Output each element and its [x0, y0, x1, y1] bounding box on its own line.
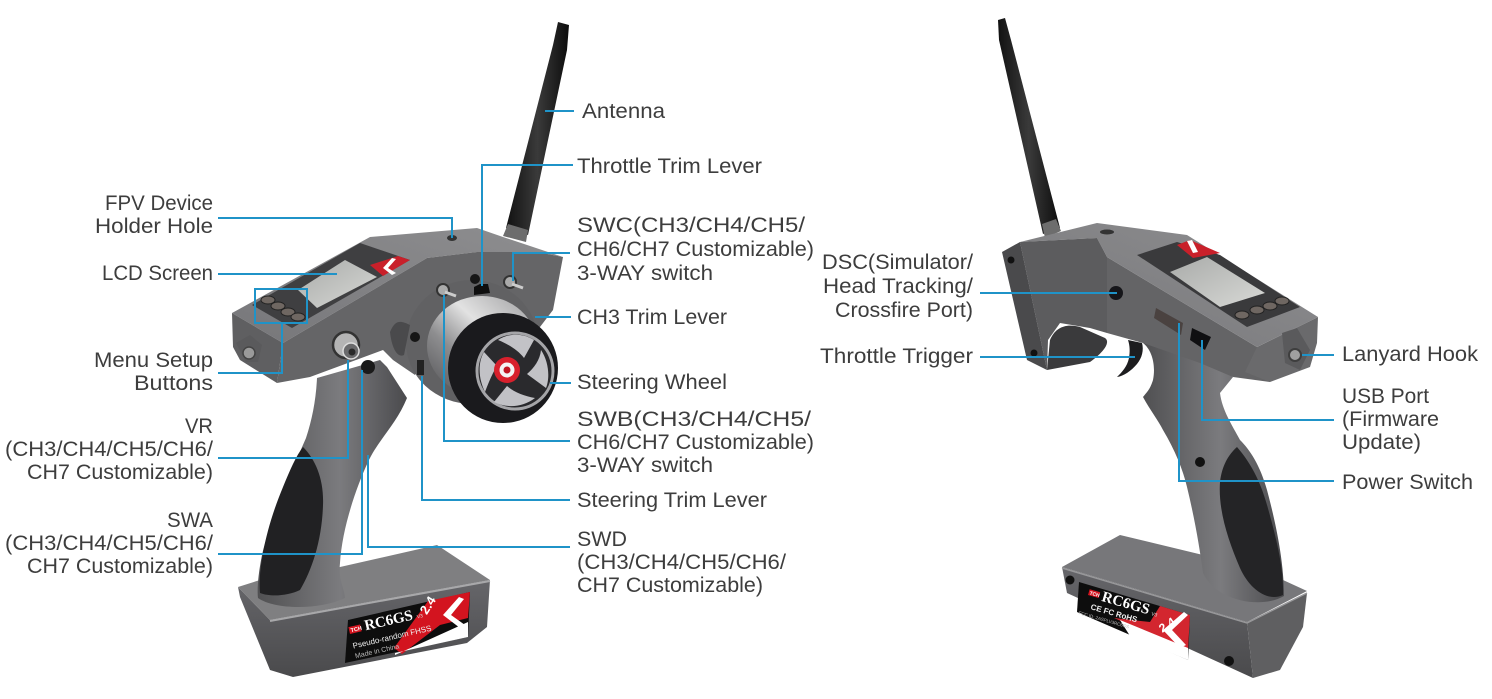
label: lanyard hook: Lanyard Hook — [1342, 343, 1479, 366]
label: menu setup buttons: Buttons — [134, 372, 213, 395]
antenna — [998, 18, 1061, 238]
label: SWA — [5, 509, 213, 578]
block face — [1020, 238, 1107, 370]
SWC toggle — [504, 276, 523, 288]
label: menu setup buttons: Menu Setup — [94, 349, 213, 372]
side surface — [277, 252, 563, 383]
silver cylinder — [427, 296, 537, 396]
label: SWA: SWA — [167, 509, 213, 532]
base label: Made in China — [354, 643, 400, 660]
label: FPV device holder hole — [95, 192, 213, 238]
label: SWD: SWD — [577, 528, 627, 551]
label: SWC: 3-WAY switch — [577, 262, 713, 285]
label: FPV device holder hole: Holder Hole — [95, 215, 213, 238]
label: LCD screen: LCD Screen — [102, 262, 213, 285]
label: throttle trim lever: Throttle Trim Lever — [577, 155, 762, 178]
label: SWD — [577, 528, 786, 597]
leader lines: right transmitter — [980, 293, 1334, 481]
labels: left column — [5, 192, 213, 578]
label: VR — [5, 415, 213, 484]
SWB toggle — [437, 284, 456, 296]
base label: 2.4 — [417, 593, 439, 617]
label: antenna: Antenna — [582, 100, 665, 123]
handle — [1143, 343, 1284, 602]
lanyard hook — [1282, 328, 1310, 370]
steering wheel tire — [448, 313, 558, 423]
label: CH3 trim lever: CH3 Trim Lever — [577, 306, 727, 329]
label: VR: CH7 Customizable) — [27, 461, 213, 484]
base label: 2.4 — [1156, 614, 1178, 635]
handle — [258, 360, 407, 607]
label: DSC port: Head Tracking/ — [823, 275, 973, 298]
power switch — [1154, 308, 1183, 335]
labels: right transmitter right side — [1342, 343, 1479, 494]
menu buttons — [261, 296, 305, 321]
label: FPV device holder hole: FPV Device — [105, 192, 213, 215]
base label — [1077, 582, 1190, 660]
label: USB port — [1342, 385, 1439, 454]
steering trim lever — [417, 360, 424, 375]
base label: FCC ID: 2ASPLV3RC6GS — [1078, 610, 1130, 629]
dial housing — [390, 274, 538, 404]
label: SWD: (CH3/CH4/CH5/CH6/ — [577, 551, 786, 574]
panel logo — [370, 256, 410, 276]
top surface — [1020, 223, 1318, 347]
SWA hole — [361, 360, 375, 374]
side surface — [1107, 257, 1270, 382]
base label: CE FC RoHS — [1090, 602, 1139, 624]
base label: V3 — [416, 613, 424, 620]
top panel — [1137, 242, 1300, 327]
VR knob — [333, 332, 359, 359]
top panel — [252, 243, 410, 328]
main body — [232, 228, 563, 383]
base label: RC6GS — [363, 608, 414, 634]
panel logo — [1177, 240, 1220, 258]
DSC port — [1109, 286, 1123, 300]
label: SWC — [577, 214, 814, 285]
label: SWC: SWC(CH3/CH4/CH5/ — [577, 214, 805, 237]
rear block — [1002, 223, 1318, 382]
base — [1062, 535, 1307, 678]
label: SWB: SWB(CH3/CH4/CH5/ — [577, 408, 811, 431]
rubber grip — [260, 447, 323, 595]
label: SWA: (CH3/CH4/CH5/CH6/ — [5, 532, 213, 555]
throttle trigger — [1117, 340, 1143, 377]
left transmitter (front view) — [232, 22, 569, 677]
handle screw — [1195, 457, 1205, 467]
label: DSC port: Crossfire Port) — [835, 299, 973, 322]
label: steering trim lever: Steering Trim Lever — [577, 489, 767, 512]
LCD screen — [298, 260, 377, 308]
lanyard lug — [236, 335, 262, 362]
steering wheel rim — [477, 333, 553, 409]
label: power switch: Power Switch — [1342, 471, 1473, 494]
label: SWA: CH7 Customizable) — [27, 555, 213, 578]
hub — [494, 357, 520, 383]
base label: V3 — [1150, 611, 1158, 619]
menu buttons — [1235, 297, 1289, 319]
trigger cover — [1047, 326, 1107, 370]
LCD screen — [1170, 257, 1265, 307]
label: DSC port — [822, 251, 973, 322]
leader lines: left transmitter — [218, 111, 574, 554]
label: VR: (CH3/CH4/CH5/CH6/ — [5, 438, 213, 461]
labels: centre column — [577, 100, 814, 597]
label: USB port: (Firmware — [1342, 408, 1439, 431]
rubber grip — [1220, 447, 1283, 597]
base label: TCH — [350, 626, 363, 634]
base label: RC6GS — [1100, 589, 1151, 618]
label: DSC port: DSC(Simulator/ — [822, 251, 973, 274]
labels: right transmitter left side — [820, 251, 973, 368]
label: SWD: CH7 Customizable) — [577, 574, 763, 597]
nose — [1245, 317, 1318, 382]
label: SWB: CH6/CH7 Customizable) — [577, 431, 814, 454]
antenna — [503, 22, 569, 242]
label: VR: VR — [185, 415, 213, 438]
label: USB port: Update) — [1342, 431, 1421, 454]
label: menu setup buttons — [94, 349, 213, 395]
label: USB port: USB Port — [1342, 385, 1429, 408]
right transmitter (rear view) — [998, 18, 1318, 678]
label: SWB: 3-WAY switch — [577, 454, 713, 477]
base — [238, 545, 490, 677]
throttle trim lever — [474, 284, 490, 295]
top surface — [232, 228, 563, 343]
block edge — [1002, 242, 1047, 370]
label: SWC: CH6/CH7 Customizable) — [577, 238, 814, 261]
base label — [345, 591, 470, 663]
FPV holder hole — [447, 235, 457, 241]
base label: TCH — [1089, 590, 1101, 599]
label: steering wheel: Steering Wheel — [577, 371, 727, 394]
base label: Pseudo-random FHSS — [352, 624, 432, 651]
USB port — [1190, 328, 1211, 350]
nose — [232, 313, 283, 383]
label: SWB — [577, 408, 814, 477]
label: throttle trigger: Throttle Trigger — [820, 345, 973, 368]
